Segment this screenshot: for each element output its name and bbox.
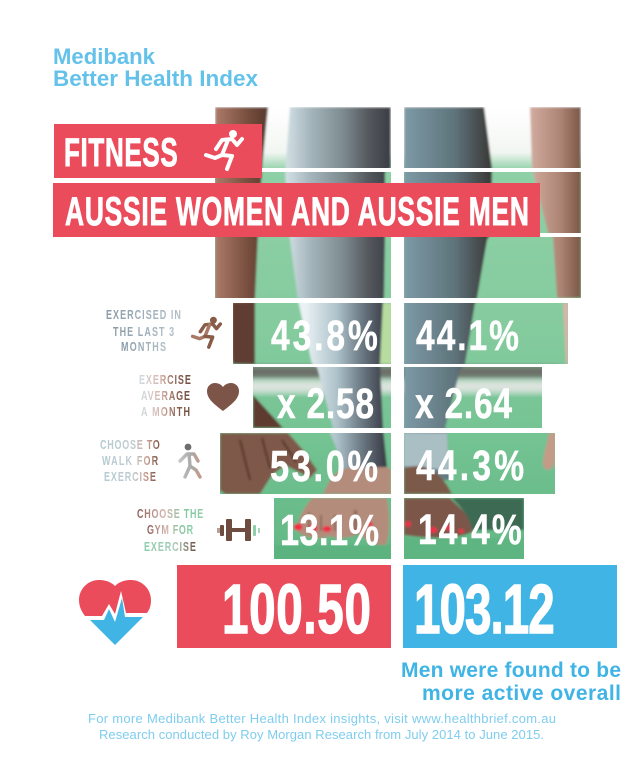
label: choose the gym for exercise (137, 508, 203, 554)
label: choose the gym for exercise: CHOOSE THE (137, 508, 203, 521)
stat: women walk 53.0%: 53.0% (270, 442, 378, 491)
stat: women exercised 43.8%: 43.8% (271, 312, 378, 360)
conclusion text: more active overall (422, 682, 621, 705)
label: exercise average a month: AVERAGE (141, 390, 190, 403)
label: exercise average a month (139, 374, 191, 419)
banner: Aussie women and Aussie men: AUSSIE WOMEN AND AUSSIE MEN (65, 190, 529, 234)
stat: women gym 13.1%: 13.1% (280, 506, 379, 555)
footer text: Research conducted by Roy Morgan Research from July 2014 to June 2015. (99, 727, 544, 742)
stat: men average x 2.64: x 2.64 (415, 380, 513, 428)
icon: walker (180, 444, 200, 477)
label: choose the gym for exercise: EXERCISE (144, 541, 196, 554)
stat: men exercised 44.1%: 44.1% (416, 312, 519, 360)
label: exercised in the last 3 months: THE LAST 3 (113, 326, 174, 339)
label: choose the gym for exercise: GYM FOR (147, 524, 193, 537)
label: exercise average a month: EXERCISE (139, 374, 191, 387)
label: exercised in the last 3 months: MONTHS (121, 341, 166, 354)
icon: dumbbell (217, 519, 260, 541)
score: men 103.12 (403, 565, 617, 648)
score: women 100.50: 100.50 (222, 570, 371, 648)
banner: FITNESS: FITNESS (64, 130, 178, 175)
logo: Medibank Better Health Index (53, 44, 258, 91)
logo: Medibank Better Health Index: Better Health Index (53, 66, 258, 91)
conclusion text: Men were found to be (401, 659, 621, 682)
icon: small runner (193, 317, 220, 347)
photo: legs and feet in strips (215, 107, 581, 559)
label: exercise average a month: A MONTH (141, 406, 190, 419)
label: choose to walk for exercise: WALK FOR (102, 455, 158, 468)
stat: men gym 14.4%: 14.4% (418, 506, 522, 554)
label: exercised in the last 3 months: EXERCISED IN (106, 309, 181, 322)
conclusion text (401, 659, 621, 705)
logo: Medibank Better Health Index: Medibank (53, 44, 155, 69)
label: choose to walk for exercise (100, 439, 160, 484)
stat: men walk 44.3%: 44.3% (416, 442, 524, 490)
icon: runner (206, 130, 242, 169)
stat: women average x 2.58: x 2.58 (277, 380, 374, 428)
icon: heart (207, 383, 239, 411)
label: choose to walk for exercise: EXERCISE (104, 471, 156, 484)
label: choose to walk for exercise: CHOOSE TO (100, 439, 160, 452)
banner: FITNESS (54, 124, 262, 178)
score: men 103.12: 103.12 (414, 570, 555, 648)
label: exercised in the last 3 months (106, 309, 181, 354)
score: women 100.50 (177, 565, 391, 648)
footer text (88, 711, 556, 742)
icon: heart with pulse (79, 580, 151, 645)
footer text: For more Medibank Better Health Index insights, visit www.healthbrief.com.au (88, 711, 556, 726)
